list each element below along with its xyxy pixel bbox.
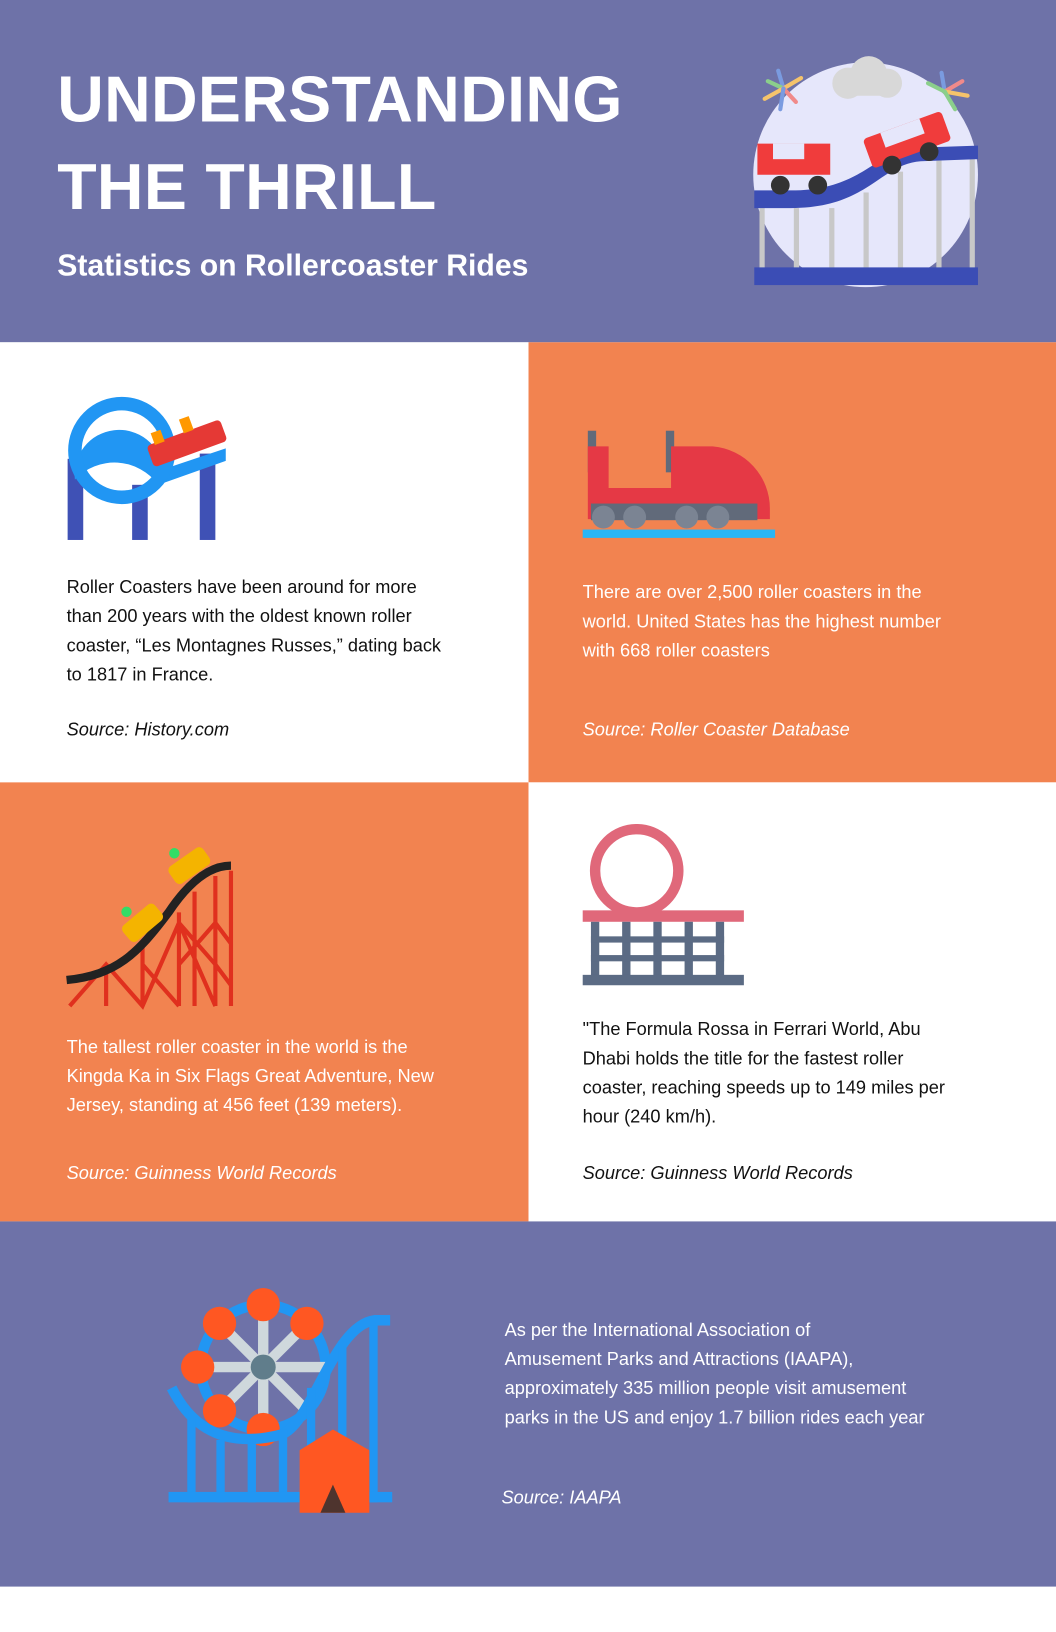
text: fastest: "The Formula Rossa in Ferrari World, Abu Dhabi holds the title for the fastest roller coaster, reaching speeds up to 149 miles per hour (240 km/h). [583, 1019, 945, 1127]
icon: rollercoaster scene [753, 56, 978, 288]
text: visitors [504, 1319, 925, 1428]
title: UNDERSTANDING [57, 65, 623, 136]
panel: fastest [529, 782, 1056, 1221]
text: visitors: approximately 335 million people visit amusement [505, 1377, 906, 1398]
text: count: There are over 2,500 roller coasters in the world. United States has the highest number with 668 roller coasters [583, 582, 941, 661]
subtitle: Statistics on Rollercoaster Rides [57, 250, 528, 283]
text: visitors: Amusement Parks and Attractions (IAAPA), [505, 1348, 853, 1369]
icon: loop coaster [68, 396, 226, 540]
source: Source: Guinness World Records [583, 1162, 853, 1183]
text: history: Roller Coasters have been around for more than 200 years with the oldest known roller coaster, “Les Montagnes Russes,” dating back to 1817 in France. [67, 576, 441, 685]
title [57, 65, 623, 224]
source: Source: IAAPA [501, 1487, 622, 1508]
text: tallest: The tallest roller coaster in the world is the Kingda Ka in Six Flags Great Adventure, New Jersey, standing at 456 feet (139 meters). [67, 1036, 434, 1115]
title: THE THRILL [57, 152, 437, 224]
header panel [0, 0, 1056, 342]
icon: wooden coaster [66, 847, 234, 1010]
panel: count [529, 342, 1056, 782]
icon: amusement park [167, 1288, 392, 1513]
icon: coaster car [582, 430, 776, 538]
text: visitors: As per the International Association of [505, 1319, 810, 1340]
panel: tallest [0, 782, 529, 1221]
source: Source: Roller Coaster Database [583, 719, 850, 740]
source: Source: History.com [67, 719, 229, 740]
icon: loop structure [582, 824, 744, 986]
panel: history [0, 342, 529, 782]
panel: visitors [0, 1221, 1056, 1587]
text: visitors: parks in the US and enjoy 1.7 billion rides each year [505, 1407, 925, 1427]
source: Source: Guinness World Records [67, 1162, 337, 1183]
